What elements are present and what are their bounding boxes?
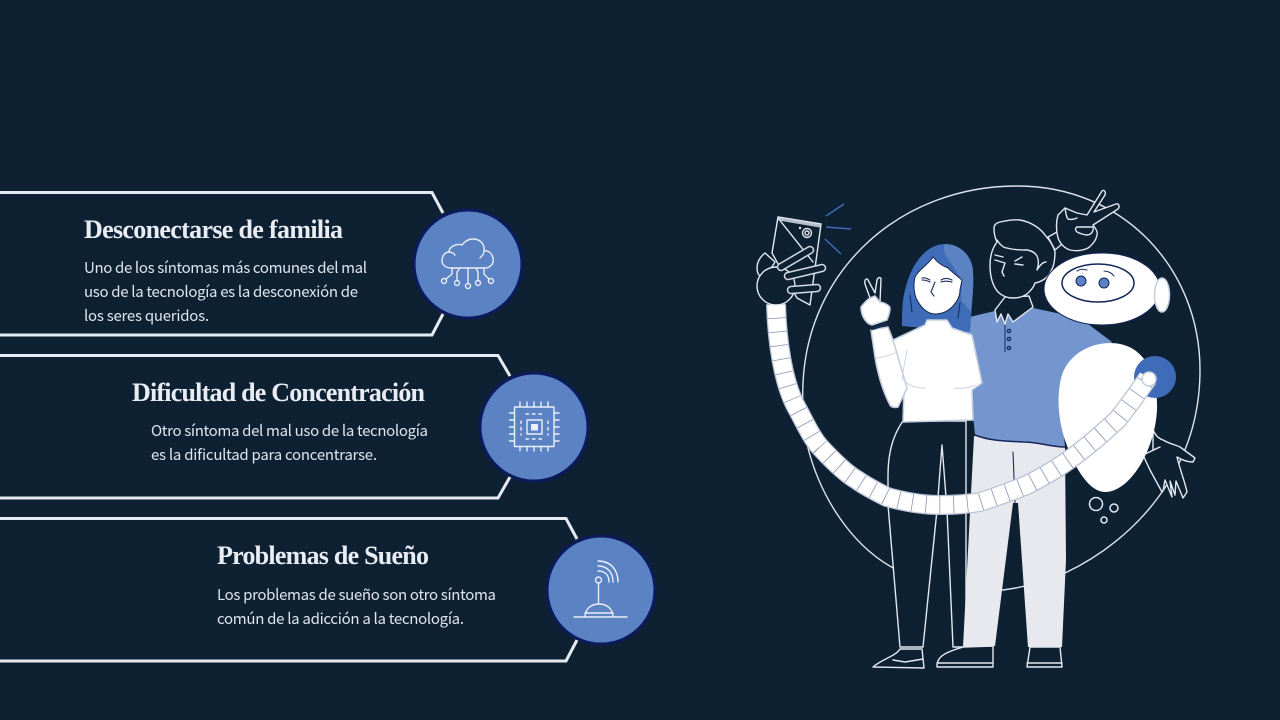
ear [1154, 278, 1170, 312]
buttons and placket [1005, 325, 1011, 352]
palm [757, 267, 795, 305]
panel frame [0, 356, 510, 498]
robot arm [776, 304, 1156, 505]
body [1059, 343, 1157, 492]
head [1044, 253, 1160, 325]
robot hand holding phone [757, 250, 822, 305]
hand with peace sign [1048, 190, 1119, 251]
heading: Problemas de Sueño [217, 541, 429, 570]
body text [84, 257, 367, 326]
sweater folds [875, 350, 975, 388]
background circle [803, 186, 1200, 590]
illustration: selfie with robot [757, 186, 1200, 668]
camera flash rays [825, 204, 851, 254]
neck and collar [995, 296, 1033, 324]
woman upper body [861, 244, 982, 422]
panel frame [0, 518, 577, 661]
hair [902, 244, 973, 332]
body text: Otro síntoma del mal uso de la tecnología [151, 420, 428, 441]
panel: dificultad de concentración [0, 356, 588, 498]
panel: desconectarse de familia [0, 192, 522, 335]
eyes [1076, 276, 1109, 288]
man [937, 190, 1119, 667]
back hand [1143, 430, 1195, 498]
body text: es la dificultad para concentrarse. [151, 444, 377, 465]
sweater [893, 320, 982, 422]
visor [1062, 264, 1134, 302]
shirt [965, 308, 1112, 447]
face details [995, 255, 1023, 276]
icon: cloud network [414, 210, 522, 318]
body text [217, 584, 496, 629]
trousers [963, 436, 1066, 647]
heading: Desconectarse de familia [84, 215, 343, 244]
woman trousers and shoe [873, 421, 966, 668]
heading: Dificultad de Concentración [132, 378, 426, 407]
bubbles [1090, 498, 1118, 523]
arm [871, 327, 907, 407]
body text: Los problemas de sueño son otro síntoma [217, 584, 496, 605]
hand with peace sign [861, 278, 890, 329]
shoes [937, 646, 993, 667]
body text: uso de la tecnología es la desconexión de [84, 281, 358, 302]
head [990, 220, 1055, 298]
thumb [757, 253, 775, 278]
body text: Uno de los síntomas más comunes del mal [84, 257, 367, 278]
panel frame [0, 192, 443, 335]
hair line and ear [997, 240, 1046, 270]
icon: antenna [547, 536, 655, 644]
body text: común de la adicción a la tecnología. [217, 608, 464, 629]
fingers [781, 250, 822, 290]
robot [1044, 253, 1195, 523]
shoulder joint [1134, 356, 1176, 398]
panel: problemas de sueño [0, 518, 655, 661]
phone [772, 217, 821, 305]
icon: microchip [480, 373, 588, 481]
body text: los seres queridos. [84, 305, 209, 326]
body text [151, 420, 428, 465]
face [914, 257, 962, 314]
